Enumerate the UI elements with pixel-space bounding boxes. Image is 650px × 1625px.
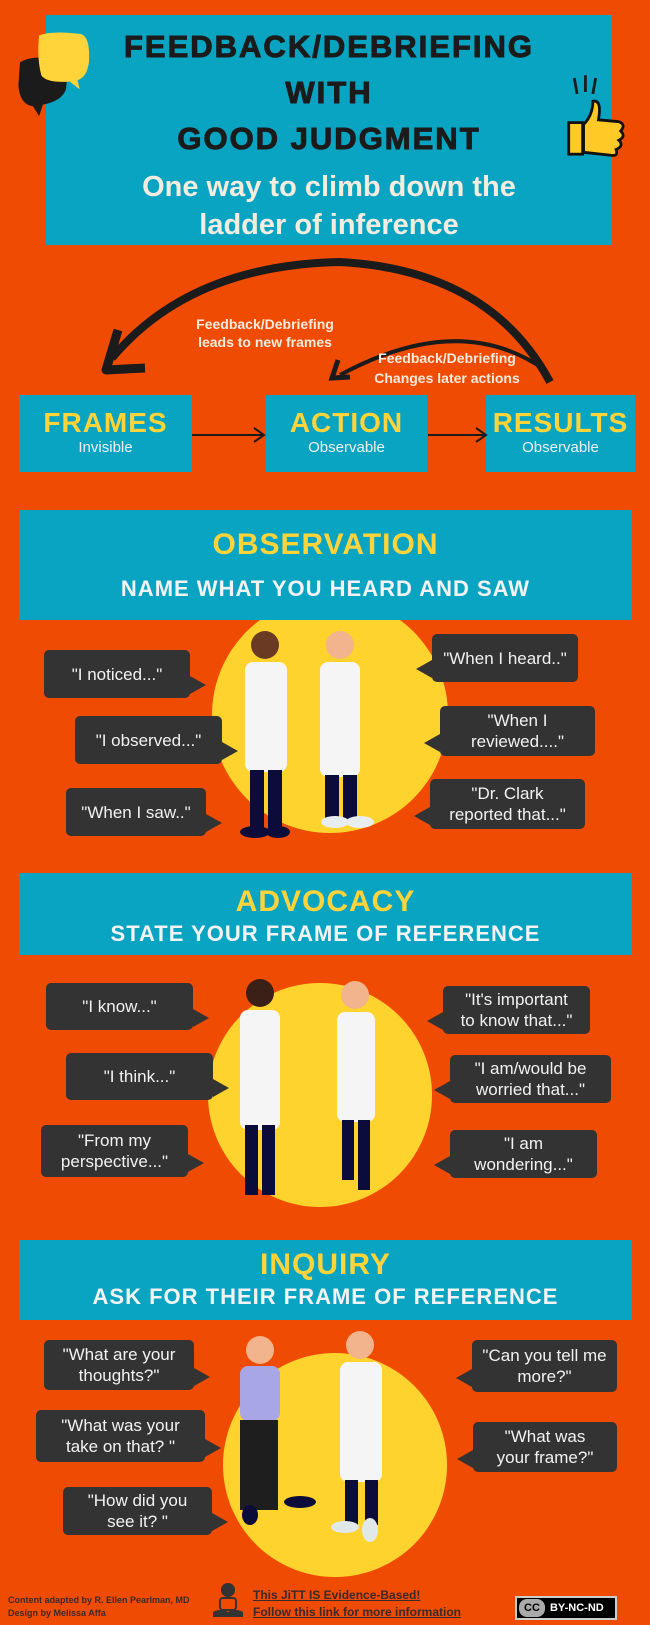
bubble — [472, 1340, 617, 1392]
arrows: feedback loops — [102, 258, 554, 384]
bubble: "What was your — [61, 1416, 180, 1435]
banner: inquiry — [19, 1240, 632, 1320]
banner: advocacy: STATE YOUR FRAME OF REFERENCE — [111, 921, 540, 946]
icon: thumbs up — [567, 75, 624, 157]
arrow label 1: leads to new frames — [198, 334, 332, 350]
banner: inquiry: INQUIRY — [260, 1248, 391, 1281]
box: action — [266, 395, 427, 472]
bubble — [41, 1125, 188, 1177]
bubble: "When I — [488, 711, 547, 730]
bubble: "I observed..." — [96, 730, 201, 750]
bubble — [432, 634, 578, 682]
footer link: Follow this link for more information — [253, 1605, 461, 1619]
arrow label 2 — [374, 350, 520, 386]
box: results: Observable — [522, 439, 599, 456]
bubble — [44, 650, 190, 698]
bubble — [63, 1487, 212, 1535]
arrow label 1 — [196, 316, 334, 350]
arrow label 2: Feedback/Debriefing — [378, 350, 516, 366]
bubble: worried that..." — [476, 1080, 585, 1099]
illustration: observation doctors — [212, 620, 448, 838]
bubble: "How did you — [88, 1491, 187, 1510]
bubble — [450, 1055, 611, 1103]
bubble — [440, 706, 595, 756]
bubble — [75, 716, 222, 764]
bubble — [443, 986, 590, 1034]
box: action: ACTION — [290, 407, 403, 438]
bubble: your frame?" — [497, 1448, 593, 1467]
subtitle — [142, 171, 516, 241]
bubble: "I am/would be — [475, 1059, 586, 1078]
title heading — [124, 29, 534, 156]
footer credits: Content adapted by R. Ellen Pearlman, MD — [8, 1595, 190, 1605]
box: frames — [19, 395, 192, 472]
bubble: to know that..." — [461, 1011, 572, 1030]
bubble: "Dr. Clark — [471, 784, 544, 803]
arrows between boxes — [192, 427, 488, 443]
bubble: thoughts?" — [79, 1366, 159, 1385]
arrow label 1: Feedback/Debriefing — [196, 316, 334, 332]
bubble: more?" — [517, 1367, 572, 1386]
box: frames: FRAMES — [43, 407, 168, 438]
bubble: "It's important — [465, 990, 568, 1009]
bubble — [473, 1422, 617, 1472]
icon: reader — [213, 1583, 243, 1617]
box: frames: Invisible — [78, 439, 133, 456]
bubble: reported that..." — [449, 805, 566, 824]
title heading: FEEDBACK/DEBRIEFING — [124, 29, 534, 64]
box: action: Observable — [308, 439, 385, 456]
cc license badge: BY-NC-ND — [550, 1602, 604, 1614]
illustration: inquiry people — [223, 1331, 447, 1577]
bubble: see it? " — [107, 1512, 168, 1531]
illustration: advocacy doctors — [208, 979, 432, 1207]
bubble: "What are your — [63, 1345, 175, 1364]
bubble: "I think..." — [104, 1067, 175, 1086]
footer credits: Design by Melissa Affa — [8, 1608, 106, 1618]
bubble: "When I saw.." — [81, 802, 191, 822]
banner: inquiry: ASK FOR THEIR FRAME OF REFERENCE — [93, 1284, 558, 1309]
title panel — [46, 15, 612, 245]
bubble — [450, 1130, 597, 1178]
bubble — [36, 1410, 205, 1462]
bubble: "From my — [78, 1131, 151, 1150]
bubble: wondering..." — [474, 1155, 573, 1174]
bubble: "I noticed..." — [72, 664, 162, 684]
banner: advocacy — [19, 873, 632, 955]
box: results: RESULTS — [493, 407, 628, 438]
arrow label 2: Changes later actions — [374, 370, 520, 386]
footer link: This JiTT IS Evidence-Based! — [253, 1588, 420, 1602]
bubble: "Can you tell me — [482, 1346, 607, 1365]
bubble: "I am — [504, 1134, 543, 1153]
bubble: "I know..." — [82, 997, 157, 1016]
cc license badge: CC — [524, 1602, 540, 1614]
footer link — [253, 1588, 461, 1619]
bubble — [44, 1340, 194, 1390]
bubble: "What was — [505, 1427, 585, 1446]
bubble: "When I heard.." — [443, 648, 567, 668]
subtitle: ladder of inference — [199, 209, 459, 241]
box: results — [486, 395, 635, 472]
banner: observation: OBSERVATION — [212, 528, 439, 561]
icon: speech bubbles — [18, 32, 90, 116]
bubble — [66, 1053, 213, 1100]
title heading: GOOD JUDGMENT — [177, 121, 481, 156]
cc license badge — [515, 1596, 617, 1620]
banner: observation: NAME WHAT YOU HEARD AND SAW — [121, 576, 530, 601]
bubble: reviewed...." — [471, 732, 564, 751]
footer credits — [8, 1595, 190, 1618]
bubble — [430, 779, 585, 829]
bubble — [66, 788, 206, 836]
banner: observation — [19, 510, 632, 620]
subtitle: One way to climb down the — [142, 171, 516, 203]
bubble: perspective..." — [61, 1152, 168, 1171]
bubble — [46, 983, 193, 1030]
bubble: take on that? " — [66, 1437, 175, 1456]
banner: advocacy: ADVOCACY — [236, 885, 415, 918]
title heading: WITH — [285, 75, 373, 110]
